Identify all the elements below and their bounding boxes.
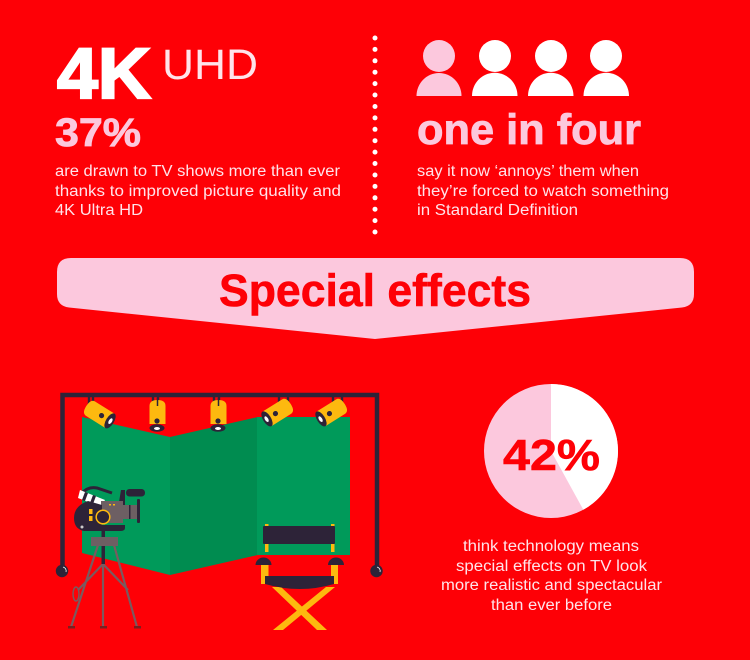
text block: one in four description: they’re forced to watch something [417,183,669,200]
pie chart: 42% [484,384,618,518]
text block: 37% description: are drawn to TV shows more than ever [55,163,340,180]
heading: 4K: 4K [57,35,151,114]
spotlight 1 [82,397,118,430]
text block: 42% description: think technology means [463,538,639,555]
stat: one in four: one in four [417,106,641,154]
heading: UHD: UHD [162,41,258,89]
text block: 37% description: 4K Ultra HD [55,202,143,219]
stat: 37%: 37% [55,111,141,155]
text block: 42% description: special effects on TV look [456,558,647,575]
text block: one in four description: in Standard Definition [417,202,578,219]
text block: 42% description [441,538,662,614]
illustration: green screen film set [56,395,383,630]
panel: 4K UHD stat [55,35,341,219]
text block: 42% description: more realistic and spectacular [441,577,662,594]
tripod [68,530,141,628]
spotlight 5 [313,397,349,428]
video camera [74,488,145,531]
text block: 37% description [55,163,341,219]
banner: Special effects [57,258,694,339]
text block: 37% description: thanks to improved picture quality and [55,183,341,200]
text block: 42% description: than ever before [491,597,612,614]
lighting rig frame [56,395,383,577]
director's chair [256,524,344,630]
heading: Special effects: Special effects [219,265,531,316]
panel: one in four stat [416,40,669,219]
spotlight 4 [259,397,295,428]
stat: 42%: 42% [503,431,600,480]
icon: four people, one highlighted [416,40,629,96]
spotlight 3 [210,397,226,432]
text block: one in four description [417,163,669,219]
green screen [82,417,350,575]
text block: one in four description: say it now ‘annoys’ them when [417,163,639,180]
spotlight 2 [150,397,166,432]
